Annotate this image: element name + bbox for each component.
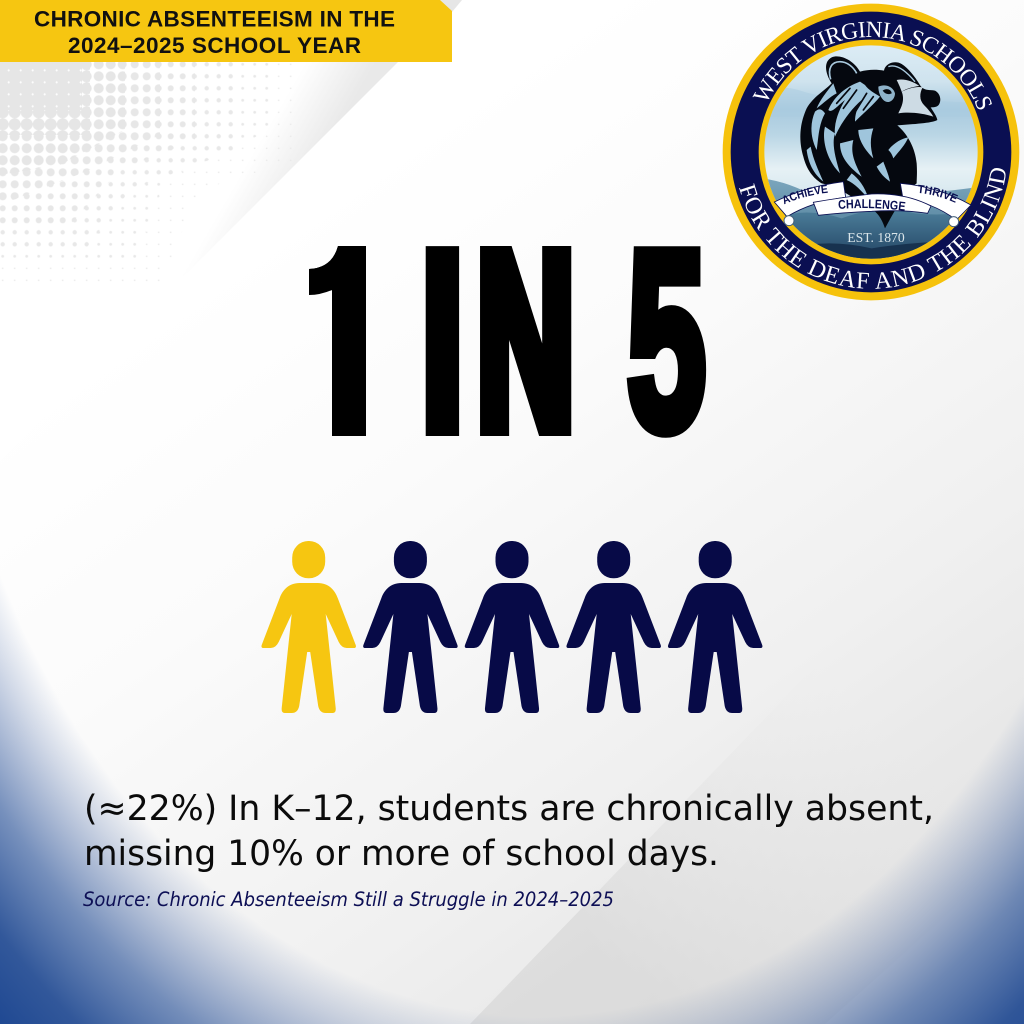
established date: EST. 1870 — [847, 230, 905, 245]
ribbon banners: ACHIEVE — [784, 184, 828, 204]
header banner — [0, 0, 462, 62]
pictogram: one in five people — [261, 541, 762, 713]
description text: (≈22%) In K–12, students are chronically absent, — [84, 789, 934, 829]
highlighted yellow person — [261, 541, 356, 713]
description text — [84, 789, 934, 874]
halftone dot pattern — [0, 62, 296, 284]
top arc text: WEST VIRGINIA SCHOOLS — [752, 22, 992, 110]
bear — [800, 56, 940, 228]
ribbon banners — [774, 181, 970, 228]
big statistic: 1 in 5: 1 — [272, 186, 410, 495]
ribbon banners: CHALLENGE — [838, 199, 906, 211]
header banner: 2024–2025 SCHOOL YEAR — [68, 33, 361, 58]
ribbon banners: THRIVE — [918, 184, 958, 203]
bottom arc text: FOR THE DEAF AND THE BLIND — [739, 168, 1006, 289]
big statistic: 1 in 5 — [309, 246, 706, 438]
description text: missing 10% or more of school days. — [84, 834, 719, 874]
big statistic: 1 in 5: I — [410, 187, 475, 496]
big statistic: 1 in 5: N — [477, 204, 574, 477]
navy person 3 — [465, 541, 559, 713]
navy person 4 — [566, 541, 661, 713]
header banner: CHRONIC ABSENTEEISM IN THE — [34, 6, 395, 32]
navy person 2 — [363, 541, 458, 713]
navy person 5 — [668, 541, 762, 713]
big statistic: 1 in 5: 5 — [627, 199, 706, 482]
school seal logo — [722, 4, 1020, 300]
source citation: Source: Chronic Absenteeism Still a Struggle in 2024–2025 — [83, 888, 614, 911]
